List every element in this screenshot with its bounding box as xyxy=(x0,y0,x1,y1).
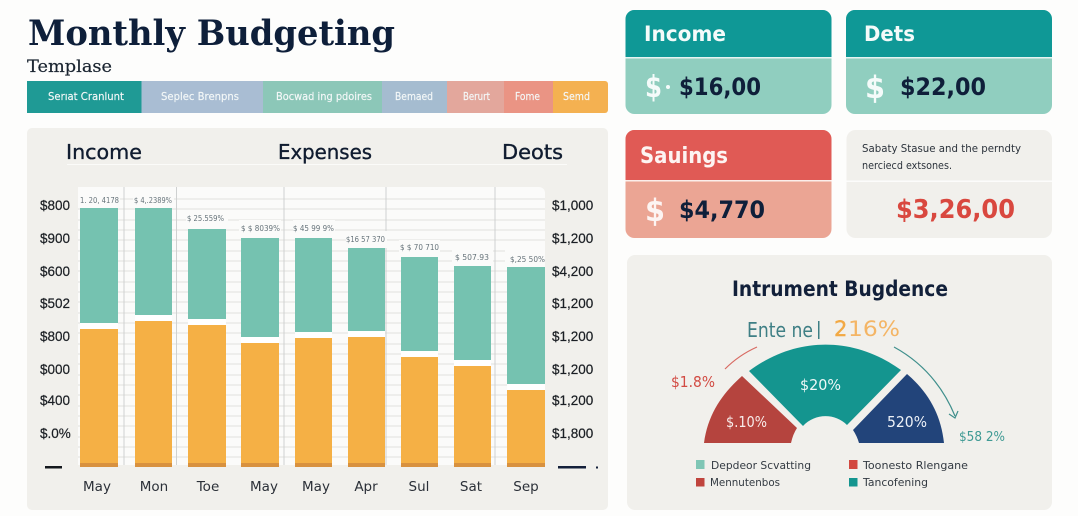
navigation strip: Seplec Brenpns xyxy=(161,91,239,103)
right axis labels: $1,000 xyxy=(552,198,593,213)
left axis labels: $800 xyxy=(40,329,70,344)
card: debts: $22,00 xyxy=(900,73,986,101)
left axis labels: $600 xyxy=(40,264,70,279)
navigation strip: Fome xyxy=(515,91,540,103)
right axis labels: $4,200 xyxy=(552,264,593,279)
card: income: $16,00 xyxy=(679,73,761,101)
right axis labels: $1,200 xyxy=(552,362,593,377)
gauge values: $58 2% xyxy=(959,430,1005,445)
navigation strip: Serıat Cranlunt xyxy=(48,91,124,103)
navigation strip: Bemaed xyxy=(395,91,433,103)
card: savings xyxy=(626,130,832,238)
right axis labels: $1,200 xyxy=(552,329,593,344)
panel: bar chart xyxy=(27,128,608,510)
bar value labels: $ 507.93 xyxy=(455,253,489,262)
chart headings: Deots xyxy=(502,140,563,164)
legend: Mennutenbos xyxy=(710,476,780,489)
right axis labels: $1,200 xyxy=(552,393,593,408)
gauge values: $20% xyxy=(800,376,841,394)
legend xyxy=(696,459,968,489)
card: debts: Dets xyxy=(864,22,915,46)
month labels: Sul xyxy=(409,479,429,495)
chart headings xyxy=(66,140,567,165)
bar value labels: $ 45 99 9% xyxy=(293,224,334,233)
legend: Toonesto Rlengane xyxy=(862,459,968,472)
month labels: Mon xyxy=(140,479,168,495)
navigation strip: Semd xyxy=(563,91,590,103)
card: note: Sabaty Stasue and the perndty xyxy=(862,142,1021,155)
bar value labels xyxy=(80,196,545,264)
left axis labels: $000 xyxy=(40,362,70,377)
bar value labels: 1. 20, 4178 xyxy=(80,196,119,205)
gauge values: $.10% xyxy=(726,413,767,431)
arrow: teal xyxy=(894,347,958,418)
chart headings: Income xyxy=(66,140,142,164)
card: savings: $4,770 xyxy=(679,196,765,224)
bar value labels: $ 25.559% xyxy=(187,214,224,223)
arc: red xyxy=(725,347,757,369)
card: debts: $ xyxy=(865,70,885,106)
month labels: May xyxy=(302,479,330,495)
gauge label xyxy=(747,317,900,342)
month labels: May xyxy=(250,479,278,495)
gauge values xyxy=(671,373,1005,445)
navigation strip xyxy=(27,81,608,113)
gauge segment: red xyxy=(704,376,797,443)
left axis labels: $800 xyxy=(40,198,70,213)
right axis labels: $1,800 xyxy=(552,426,593,441)
gauge segment: navy xyxy=(853,374,944,443)
gauge label: 16% xyxy=(848,317,900,341)
legend: Tancofening xyxy=(862,476,928,489)
card: debts xyxy=(846,10,1052,114)
left axis labels: $.0% xyxy=(40,426,71,441)
bar value labels: $,25 50% xyxy=(510,255,545,264)
card: income: $ xyxy=(645,70,662,105)
left axis labels: $502 xyxy=(40,296,70,311)
gauge segment: teal xyxy=(749,345,901,426)
month labels: Apr xyxy=(354,479,378,495)
month labels: May xyxy=(83,479,111,495)
right axis labels xyxy=(552,198,598,468)
card: note xyxy=(846,130,1052,238)
bar value labels: $ 4,.2389% xyxy=(134,196,172,205)
gauge values: 520% xyxy=(887,413,927,431)
card: income: Income xyxy=(644,22,726,46)
card: savings: $ xyxy=(645,193,665,229)
chart headings: Expenses xyxy=(278,140,372,164)
navigation strip: Bocwad ing pdoires xyxy=(276,91,372,103)
title: Monthly Budgeting xyxy=(28,13,395,54)
month labels xyxy=(83,479,539,495)
right axis labels: $1,200 xyxy=(552,296,593,311)
month labels: Sat xyxy=(460,479,482,495)
subtitle: Templase xyxy=(27,57,112,76)
left axis labels: $400 xyxy=(40,393,70,408)
card: note: $3,26,00 xyxy=(896,195,1015,225)
card: savings: Sauings xyxy=(640,144,728,169)
left axis labels xyxy=(40,198,71,468)
legend: Depdeor Scvatting xyxy=(711,459,811,472)
chart plot background xyxy=(78,187,545,465)
card: income xyxy=(626,10,832,114)
gauge values: $1.8% xyxy=(671,373,715,391)
card: note: nerciecd extsones. xyxy=(862,159,952,172)
bar value labels: $ $ 70 710 xyxy=(400,243,439,252)
bar value labels: $ $ 8039% xyxy=(241,224,280,233)
gauge heading: Intrument Bugdence xyxy=(732,277,948,301)
left axis labels: $900 xyxy=(40,231,70,246)
month labels: Sep xyxy=(513,479,539,495)
right axis labels: $1,200 xyxy=(552,231,593,246)
navigation strip: Berurt xyxy=(463,91,490,103)
month labels: Toe xyxy=(196,479,219,495)
bar value labels: $16 57 370 xyxy=(346,235,385,244)
stacked bars xyxy=(78,190,545,467)
panel: gauge xyxy=(627,255,1052,510)
gauge label: Ente ne xyxy=(747,318,813,342)
gauge label: 2 xyxy=(834,317,847,341)
